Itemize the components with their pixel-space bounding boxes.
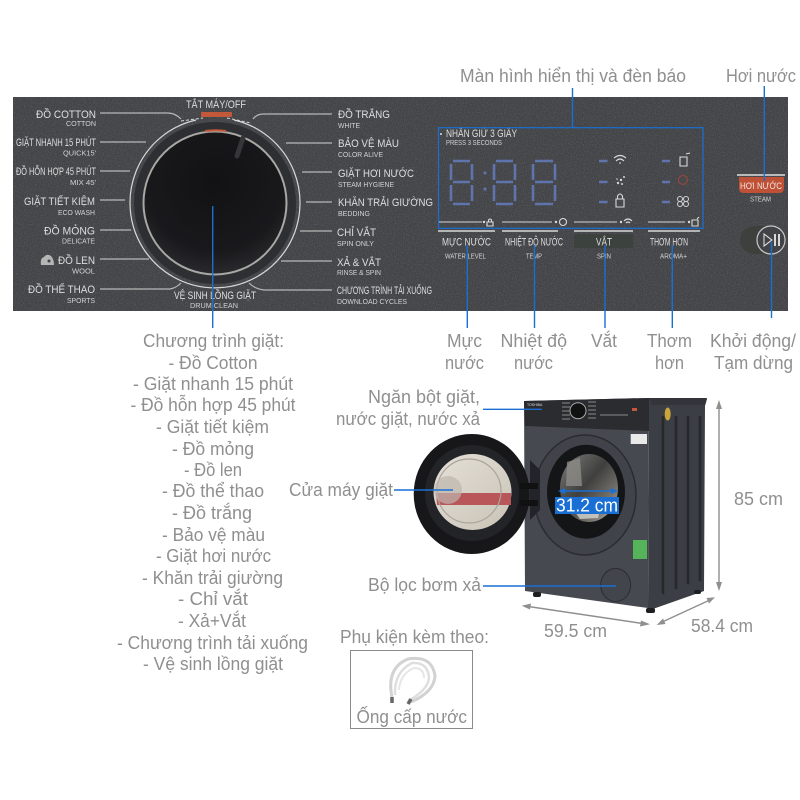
right program labels: COLOR ALIVE [338,150,383,159]
press 3 seconds note: PRESS 3 SECONDS [446,138,502,147]
off indicator [186,98,246,117]
accessories box: Ống cấp nước [356,706,467,727]
label: aroma [647,331,692,373]
label: start pause [710,331,796,373]
label: water temperature [500,331,567,373]
label: water level [445,331,484,373]
right program labels: KHĂN TRẢI GIƯỜNG [338,196,433,209]
function buttons: TEMP [526,251,542,260]
machine side [648,398,707,610]
wash program list: - Đồ thể thao [162,481,264,501]
steam button: STEAM [750,194,771,204]
function buttons: VẮT [596,236,612,249]
icon: flower [678,196,688,206]
heading: display and indicators: Màn hình hiển thị và đèn báo [460,66,686,86]
drum clean label: DRUM CLEAN [190,301,238,310]
press 3 seconds note [440,127,517,147]
left program labels: ĐỒ THỂ THAO [28,283,95,296]
right program labels: DOWNLOAD CYCLES [337,297,407,306]
height dimension: 85 cm [734,489,783,509]
function buttons: MỰC NƯỚC [442,236,491,249]
wash program list: - Bảo vệ màu [162,525,265,545]
depth dimension: 58.4 cm [691,616,753,636]
right program labels: GIẶT HƠI NƯỚC [338,167,414,180]
function buttons: AROMA+ [660,251,688,260]
wash program list [117,331,308,674]
long press indicators [439,217,699,226]
label: detergent drawer: nước giặt, nước xả [336,409,481,429]
left program labels: ECO WASH [58,208,95,217]
function buttons: SPIN [597,251,611,260]
drum opening [530,435,636,555]
label: drain pump filter: Bộ lọc bơm xả [368,575,482,595]
label: start pause: Khởi động/ [710,331,796,351]
wash program list: - Đồ Cotton [168,353,258,373]
left program labels: ĐỒ HỖN HỢP 45 PHÚT [16,165,96,178]
steam button [737,175,785,204]
drum clean label [174,289,256,310]
icon: phone [680,153,690,166]
wash program list: Chương trình giặt: [143,331,284,351]
wash program list: - Khăn trải giường [142,568,283,588]
labels on machine [601,434,647,602]
left program labels: ĐỒ LEN [58,254,95,267]
left program labels: COTTON [66,119,96,128]
door diameter dimension: 31.2 cm [556,496,618,516]
width dimension: 59.5 cm [544,621,607,641]
right program labels: BẢO VỆ MÀU [338,137,399,150]
right program labels: SPIN ONLY [337,239,374,248]
press 3 seconds note: NHẤN GIỮ 3 GIÂY [446,127,517,140]
control band: TOSHIBA [527,403,543,407]
wash program list: - Giặt nhanh 15 phút [133,374,293,394]
wash program list: - Giặt tiết kiệm [156,417,269,437]
control panel [13,97,788,311]
width dimension [522,604,650,641]
start pause button [740,226,785,254]
callout lines [213,86,771,328]
icon: water hose [391,658,435,704]
depth dimension [657,597,753,636]
right program labels: XẢ & VẮT [337,256,381,269]
right program labels: STEAM HYGIENE [338,180,394,189]
left program labels: MIX 45' [70,178,97,187]
left program labels: QUICK15' [63,148,97,158]
wash program list: - Đồ len [184,460,242,480]
accessories box [350,650,472,728]
panel background [13,97,788,311]
seven segment display [451,161,555,204]
right program labels: WHITE [338,121,360,130]
program dial [130,118,300,288]
wash program list: - Đồ mỏng [172,439,254,459]
icon: red indicator [678,176,688,184]
steam button: HƠI NƯỚC [740,181,782,192]
label: water level: nước [445,353,484,373]
left program labels: ĐỒ COTTON [36,108,96,121]
wash program list: - Đồ hỗn hợp 45 phút [130,394,296,415]
label: water temperature: Nhiệt độ [500,331,567,351]
function buttons: THƠM HƠN [650,237,688,249]
left program labels: GIẶT TIẾT KIỆM [24,195,95,208]
feet [533,590,701,613]
function buttons [438,231,700,260]
right program labels: RINSE & SPIN [337,268,381,277]
label: spin: Vắt [591,330,617,351]
display frame [438,128,703,228]
wash program list: - Vệ sinh lồng giặt [143,654,283,674]
label: start pause: Tạm dừng [714,353,793,373]
off indicator: TẮT MÁY/OFF [186,98,246,111]
label: water level: Mực [447,331,482,351]
function buttons: WATER LEVEL [445,251,486,260]
label: aroma: hơn [655,353,684,373]
label: detergent drawer [336,387,481,429]
right program labels [337,108,433,306]
label: aroma: Thơm [647,331,692,351]
drum clean label: VỆ SINH LỒNG GIẶT [174,289,256,302]
wash program list: - Giặt hơi nước [156,546,271,566]
left program labels: GIẶT NHANH 15 PHÚT [16,136,96,149]
label: door: Cửa máy giặt [289,480,393,500]
machine front [524,398,649,608]
control band [524,398,649,431]
open door [414,434,538,554]
wash program list: - Đồ trắng [172,502,252,523]
label: detergent drawer: Ngăn bột giặt, [368,387,480,407]
dial leader lines [100,113,332,290]
left program labels: DELICATE [62,236,95,246]
right program labels: CHỈ VẮT [337,226,376,239]
right program labels: CHƯƠNG TRÌNH TẢI XUỐNG [337,283,432,297]
icon: wifi [614,156,626,163]
icon: steam dots [616,176,625,185]
label: water temperature: nước [514,353,553,373]
wash program list: - Chương trình tải xuống [117,633,308,653]
right program labels: ĐỒ TRẮNG [338,108,390,121]
function buttons: NHIỆT ĐỘ NƯỚC [505,236,563,249]
icon: wool [41,255,54,265]
wash program list: - Xả+Vắt [178,610,246,631]
icon: lock [616,194,624,207]
height dimension [716,400,783,591]
washer callout lines [394,409,616,586]
status indicators [599,153,690,207]
left program labels: WOOL [72,266,95,276]
left program labels: SPORTS [67,296,95,305]
wash program list: - Chỉ vắt [178,588,248,609]
accessories heading: Phụ kiện kèm theo: [340,627,489,647]
left program labels [16,108,97,305]
washing machine [414,398,707,613]
right program labels: BEDDING [338,209,370,218]
left program labels: ĐỒ MỎNG [44,224,95,238]
